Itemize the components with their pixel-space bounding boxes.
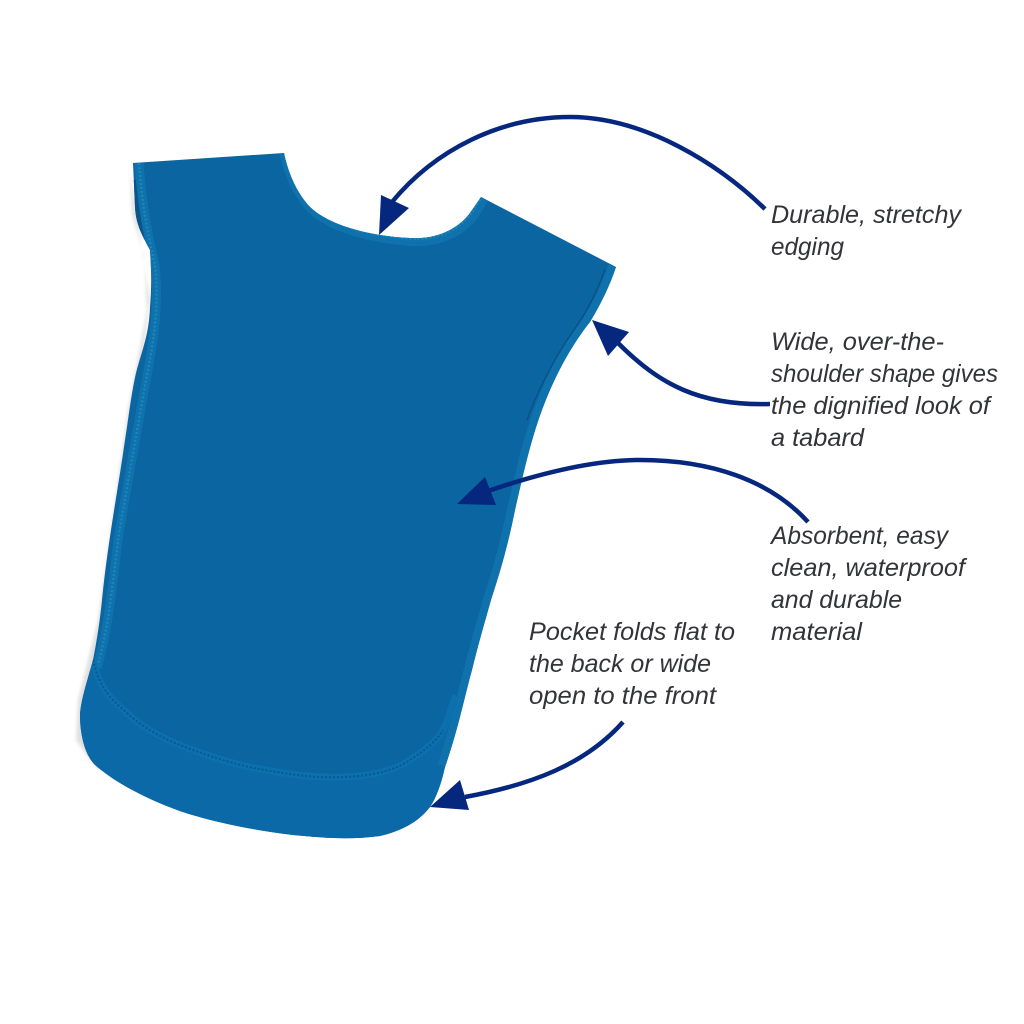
callout: shoulder shape: [771, 328, 998, 452]
callout: durable edging: [771, 201, 963, 261]
callout: pocket: the back or wide: [529, 650, 711, 678]
callout: pocket: Pocket folds flat to: [529, 618, 735, 646]
arrow: to material: [457, 460, 808, 522]
callout: shoulder shape: shoulder shape gives: [771, 360, 998, 388]
stitched pocket seam: [93, 660, 456, 777]
callout: material: Absorbent, easy: [769, 522, 949, 550]
arrow: to shoulder: [592, 320, 770, 404]
stitched edge: left: [97, 163, 157, 668]
stitched edge: right: [445, 267, 616, 767]
bib product illustration: [60, 153, 616, 850]
callout: pocket: [529, 618, 735, 710]
callout: shoulder shape: the dignified look of: [771, 392, 993, 420]
callout: material: material: [771, 618, 863, 646]
callout: material: and durable: [771, 586, 902, 614]
callout: shoulder shape: a tabard: [771, 424, 865, 452]
back of bib visible at shoulder: [134, 180, 150, 250]
callout: shoulder shape: Wide, over-the-: [771, 328, 944, 356]
callout: material: clean, waterproof: [771, 554, 968, 582]
callout: durable edging: Durable, stretchy: [771, 201, 963, 229]
callout: pocket: open to the front: [529, 682, 717, 710]
arrow: to neck edging: [379, 117, 765, 235]
stitched edge: neck: [284, 153, 484, 241]
pocket band: [80, 660, 460, 838]
arrow: to pocket: [430, 722, 623, 810]
callout: material: [769, 522, 968, 646]
callout: durable edging: edging: [771, 233, 844, 261]
